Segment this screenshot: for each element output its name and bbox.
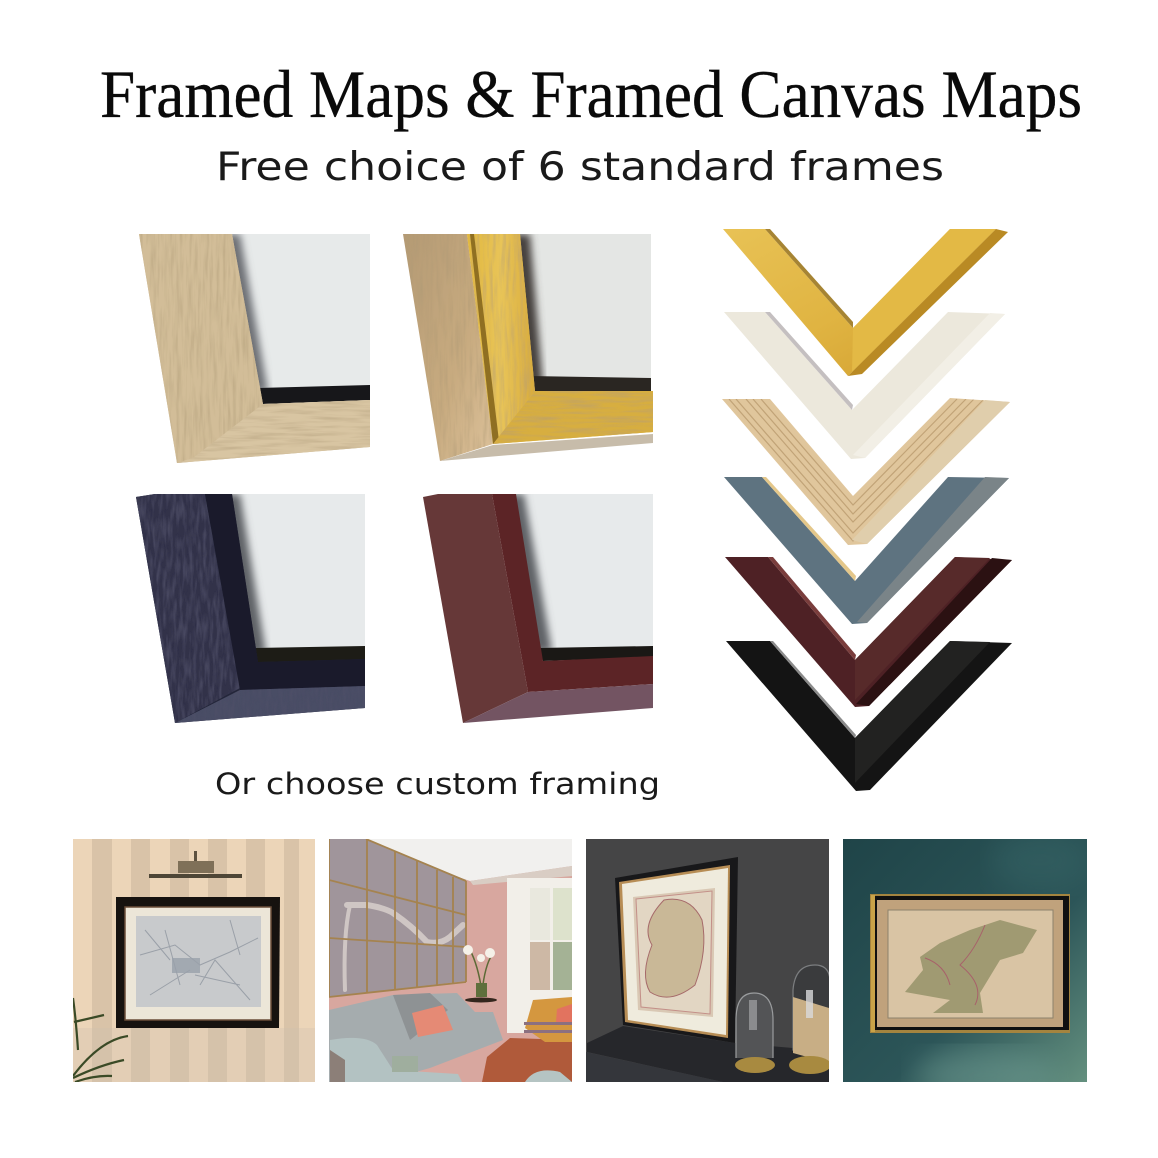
photo: framed map under picture light (73, 839, 315, 1082)
panel: oak canvas frame corner (139, 234, 370, 463)
moulding: light oak (722, 398, 1010, 545)
panel: stack of six frame mouldings (722, 229, 1012, 791)
panel: navy canvas frame corner (136, 494, 365, 723)
ceiling (368, 839, 572, 881)
panel: gold canvas frame corner (403, 234, 653, 461)
photo: Ireland map on dark shelf (586, 839, 831, 1082)
moulding: black (726, 641, 1012, 791)
photo: pink living room with map wall (329, 839, 573, 1082)
panel: burgundy canvas frame corner (423, 494, 653, 723)
moulding: gold (723, 229, 1008, 376)
tall dome with note (789, 965, 831, 1074)
black frame (615, 857, 738, 1043)
picture light (149, 851, 242, 878)
glass dome (735, 993, 775, 1073)
ottoman (482, 1038, 572, 1082)
gilt frame (870, 894, 1070, 1033)
orchid (463, 945, 497, 1002)
sofa (329, 993, 503, 1082)
photo: map on teal wall (843, 839, 1087, 1082)
moulding: burgundy (725, 557, 1012, 707)
moulding: slate blue (724, 477, 1009, 624)
plant (73, 998, 128, 1082)
title: Framed Maps & Framed Canvas Maps (100, 56, 1082, 132)
window (507, 878, 573, 1033)
armchair (524, 997, 572, 1042)
shelf (587, 1026, 829, 1082)
black frame (116, 897, 280, 1028)
custom framing caption: Or choose custom framing (215, 767, 660, 801)
subtitle: Free choice of 6 standard frames (216, 145, 944, 190)
moulding: white (724, 312, 1005, 459)
wall map grid (329, 839, 466, 997)
